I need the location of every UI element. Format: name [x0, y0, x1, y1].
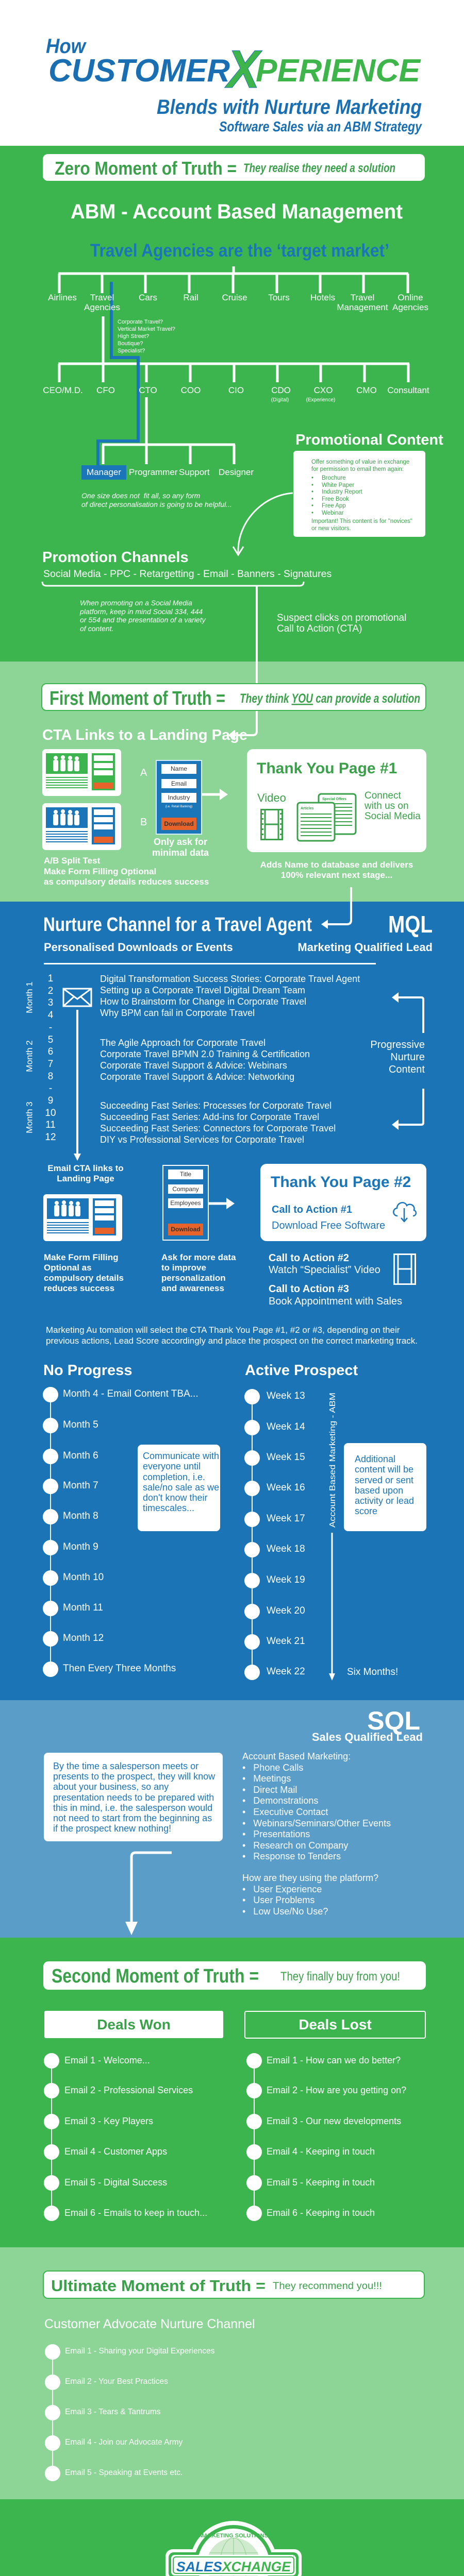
box: promotional content list: • Free Book — [311, 496, 349, 502]
heading box: First Moment of Truth: First Moment of Truth = — [49, 688, 225, 709]
text: calls to action 2 and 3: Call to Action #3 — [269, 1283, 349, 1295]
list: nurture email titles: The Agile Approach for Corporate Travel — [100, 1038, 266, 1048]
timeline: deals lost emails: Email 6 - Keeping in touch — [267, 2208, 375, 2218]
org tree diagram: CIO — [228, 385, 244, 395]
panel: Thank You Page #1: with us on — [364, 801, 409, 811]
list: account based marketing activities: • Meetings — [242, 1773, 291, 1784]
panel: Thank You Page #1: Connect — [364, 790, 401, 801]
heading: SQL: SQL — [367, 1706, 420, 1735]
timeline: deals lost emails — [246, 2053, 422, 2223]
org tree diagram: (Experience) — [306, 397, 335, 403]
heading box: Second Moment of Truth — [43, 1961, 426, 1990]
panel: Thank You Page #1: Thank You Page #1 — [257, 760, 397, 777]
note: social media 334: platform, keep in mind Social 334, 444 — [80, 607, 203, 615]
email numbers column: 8 — [48, 1071, 53, 1082]
title: How: How — [46, 35, 87, 58]
timeline: active prospect: Week 17 — [267, 1513, 305, 1524]
heading box: Ultimate Moment of Truth — [43, 2270, 425, 2299]
text: marketing automation: previous actions, Lead Score accordingly and place the prospect on the correct marketing track. — [46, 1336, 418, 1346]
text: make form filling optional — [44, 1252, 124, 1293]
timeline: deals lost emails: Email 4 - Keeping in touch — [267, 2146, 375, 2157]
list: account based marketing activities: How are they using the platform? — [242, 1873, 378, 1883]
month labels: Month 3 — [25, 1101, 35, 1133]
text: A/B split test: A/B Split Test — [44, 856, 100, 866]
heading box: Zero Moment of Truth — [43, 154, 425, 181]
roles: Programmer Support Designer — [129, 467, 254, 477]
heading: Active Prospect: Active Prospect — [245, 1362, 358, 1379]
text: calls to action 2 and 3 — [269, 1252, 416, 1307]
heading box: First Moment of Truth: They think YOU can provide a solution — [240, 691, 420, 706]
list: nurture email titles: Succeeding Fast Series: Add-ins for Corporate Travel — [100, 1112, 319, 1122]
subheading: Sales Qualified Lead: Sales Qualified Lead — [312, 1731, 423, 1743]
icon: landing page — [43, 1194, 122, 1241]
text: six months: Six Months! — [347, 1667, 398, 1677]
heading: Nurture Channel for a Travel Agent — [43, 911, 433, 938]
org tree diagram: Cars — [139, 293, 157, 302]
list: account based marketing activities: • Executive Contact — [242, 1807, 328, 1817]
timeline: advocate emails: Email 1 - Sharing your Digital Experiences — [65, 2347, 214, 2355]
timeline: active prospect: Week 19 — [267, 1574, 305, 1585]
icon: film strip — [393, 1253, 416, 1285]
text: calls to action 2 and 3: Call to Action #2 — [269, 1252, 349, 1264]
org tree diagram: CTO — [139, 385, 157, 395]
org tree diagram: Boutique? — [118, 341, 143, 347]
org tree diagram: Travel — [351, 293, 374, 302]
timeline: deals lost emails: Email 1 - How can we do better? — [267, 2055, 401, 2065]
title: CUSTOMERXPERIENCE: PERIENCE — [256, 53, 421, 89]
text: calls to action 2 and 3: Book Appointment with Sales — [269, 1296, 402, 1307]
text: email CTA links — [47, 1163, 124, 1183]
list: nurture email titles: Digital Transformation Success Stories: Corporate Travel Agent — [100, 974, 360, 984]
text: email CTA links: Landing Page — [57, 1174, 114, 1183]
text: suspect clicks CTA: Call to Action (CTA) — [277, 623, 362, 634]
panel: Thank You Page #1 — [247, 749, 426, 852]
list: account based marketing activities: • Response to Tenders — [242, 1851, 341, 1861]
email numbers column: 12 — [45, 1132, 56, 1143]
list: nurture email titles: Corporate Travel Support & Advice: Webinars — [100, 1060, 287, 1071]
list: account based marketing activities: Account Based Marketing: — [242, 1751, 351, 1761]
panel: nurture channel (MQL) — [0, 902, 464, 1700]
org tree diagram: CFO — [96, 385, 115, 395]
box: promotional content list: • Free App — [311, 503, 346, 509]
org tree diagram: Hotels — [310, 293, 335, 302]
heading box: Ultimate Moment of Truth: They recommend you!!! — [273, 2281, 382, 2292]
timeline: advocate emails: Email 4 - Join our Advocate Army — [65, 2438, 183, 2447]
text: marketing automation — [46, 1325, 418, 1346]
timeline: no progress: Month 7 — [63, 1480, 98, 1491]
labels: A and B: B — [140, 817, 147, 828]
text: only ask for minimal data: minimal data — [152, 848, 209, 858]
email numbers column: 11 — [45, 1120, 56, 1130]
heading box: Zero Moment of Truth: They realise they need a solution — [243, 161, 395, 175]
box: promotional content list: • Webinar — [311, 510, 344, 516]
panel: SQL sales qualified lead — [0, 1700, 464, 1938]
panel: ultimate moment of truth — [0, 2247, 464, 2499]
org tree diagram: COO — [181, 385, 201, 395]
text: ask for more data: personalization — [161, 1273, 226, 1283]
text: adds name to database: Adds Name to database and delivers — [260, 860, 413, 870]
timeline: no progress: Month 4 - Email Content TBA... — [63, 1388, 198, 1399]
email numbers column: 4 — [48, 1010, 53, 1021]
text: A/B split test — [44, 856, 209, 887]
text: marketing automation: Marketing Au tomation will select the CTA Thank You Page #1, #2 or #3, depending on their — [46, 1325, 400, 1335]
text: adds name to database — [260, 860, 413, 880]
icon: landing page A — [42, 749, 121, 796]
timeline: no progress: Month 12 — [63, 1633, 104, 1643]
timeline: deals won emails: Email 3 - Key Players — [64, 2116, 153, 2126]
text: only ask for minimal data — [152, 837, 209, 858]
panel: Thank You Page #1: Video — [257, 791, 286, 804]
email numbers column: 2 — [48, 986, 53, 996]
note: social media 334 — [79, 599, 206, 633]
icon: articles and special offers documents: Special Offers — [322, 798, 346, 801]
box: promotional content list: • Industry Report — [311, 489, 362, 495]
org tree diagram: Agencies — [392, 302, 428, 312]
panel: Thank You Page #2: Call to Action #1 — [272, 1204, 352, 1215]
email numbers column: 6 — [48, 1046, 53, 1057]
text: ask for more data: Ask for more data — [161, 1252, 236, 1262]
heading: ABM - Account Based Management: ABM - Account Based Management — [71, 200, 403, 223]
timeline: advocate emails: Email 2 - Your Best Practices — [65, 2377, 168, 2386]
text: only ask for minimal data: Only ask for — [154, 837, 207, 847]
text: adds name to database: 100% relevant next stage... — [281, 870, 392, 880]
subheading: personalised downloads / MQL: Marketing Qualified Lead — [297, 941, 433, 954]
icon: landing page B — [42, 803, 121, 850]
text: progressive nurture content: Progressive — [370, 1039, 425, 1050]
form: name email industry: Download — [164, 820, 194, 827]
box: Deals Won: Deals Won — [97, 2016, 171, 2032]
month labels: Month 2 — [25, 1040, 35, 1072]
text: ask for more data — [161, 1252, 236, 1293]
heading box: Ultimate Moment of Truth: Ultimate Moment of Truth = — [51, 2277, 266, 2295]
box: promotional content list: or new visitors. — [311, 526, 351, 532]
heading: Promotional Content: Promotional Content — [295, 432, 443, 448]
timeline: active prospect: Week 14 — [267, 1421, 305, 1432]
subheading: personalised downloads / MQL — [44, 941, 433, 954]
timeline: deals lost emails: Email 2 - How are you getting on? — [267, 2085, 406, 2095]
email numbers column: - — [49, 1083, 52, 1094]
heading: Travel Agencies target market: Travel Agencies are the ‘target market’ — [90, 241, 389, 261]
text: A/B split test: as compulsory details reduces success — [44, 877, 209, 887]
arrow: form to thank you page 2 — [209, 1198, 235, 1209]
org tree diagram: Consultant — [387, 385, 429, 395]
role: Manager box — [81, 465, 126, 480]
list: account based marketing activities: • Demonstrations — [242, 1795, 318, 1806]
org tree diagram: CEO/M.D. — [43, 385, 83, 395]
email numbers column — [45, 973, 56, 1143]
form: name email industry — [156, 760, 202, 835]
labels: A and B: A — [140, 767, 147, 778]
org tree diagram: Corporate Travel? — [118, 319, 163, 325]
list: nurture email titles: Setting up a Corporate Travel Digital Dream Team — [100, 985, 305, 995]
text: make form filling optional: compulsory details — [44, 1273, 124, 1283]
panel: zero moment of truth / ABM — [0, 146, 464, 662]
email numbers column: 1 — [48, 973, 53, 984]
panel: second moment of truth — [0, 1938, 464, 2247]
org tree diagram: Management — [337, 302, 388, 312]
list: nurture email titles — [100, 974, 360, 1145]
panel: Thank You Page #1: Social Media — [364, 811, 421, 822]
form: name email industry: Email — [171, 780, 187, 787]
heading box: Zero Moment of Truth: Zero Moment of Truth = — [55, 158, 237, 179]
timeline: deals won emails: Email 6 - Emails to keep in touch... — [64, 2208, 207, 2218]
list: nurture email titles: Corporate Travel Support & Advice: Networking — [100, 1072, 294, 1082]
list: nurture email titles: DIY vs Professional Services for Corporate Travel — [100, 1134, 304, 1145]
timeline: active prospect: Week 15 — [267, 1452, 305, 1463]
text: make form filling optional: Make Form Filling — [44, 1252, 119, 1262]
list: account based marketing activities: • Phone Calls — [242, 1762, 303, 1773]
text: suspect clicks CTA — [277, 613, 406, 634]
icon: envelope with down arrow — [63, 988, 92, 1161]
form: title company employees: Download — [171, 1226, 201, 1233]
org tree diagram: Agencies — [84, 302, 120, 312]
callout: additional content: Additional content will be served or sent based upon activity or lead score — [355, 1454, 414, 1516]
box: promotional content list: for permission to email them again: — [311, 466, 404, 472]
org tree diagram: Travel — [90, 293, 114, 302]
list: account based marketing activities: • User Problems — [242, 1895, 314, 1905]
list: account based marketing activities: • Research on Company — [242, 1840, 348, 1851]
title: CUSTOMERXPERIENCE: CUSTOMER — [48, 53, 230, 89]
heading box: Second Moment of Truth: Second Moment of Truth = — [52, 1965, 259, 1987]
list: nurture email titles: Succeeding Fast Series: Processes for Corporate Travel — [100, 1100, 332, 1111]
logo: salesXchange badge: TM — [293, 2555, 297, 2558]
subtitle: Software Sales via an ABM Strategy: Software Sales via an ABM Strategy — [219, 118, 422, 134]
org tree diagram — [43, 266, 429, 465]
heading: customer advocate nurture channel: Customer Advocate Nurture Channel — [44, 2317, 255, 2331]
org tree diagram: Tours — [268, 293, 290, 302]
text: progressive nurture content: Content — [389, 1064, 425, 1075]
box: promotional content list: Offer something of value in exchange — [311, 459, 409, 465]
text: A/B split test: Make Form Filling Optional — [44, 867, 156, 876]
label: account based marketing vertical with arrow — [328, 1393, 337, 1681]
logo: salesXchange badge: SALESXCHANGE — [176, 2559, 291, 2574]
form: title company employees — [162, 1165, 209, 1241]
list: nurture email titles: Succeeding Fast Series: Connectors for Corporate Travel — [100, 1123, 336, 1133]
timeline: no progress: Month 8 — [63, 1511, 98, 1521]
box: promotional content list: • Brochure — [311, 475, 346, 481]
roles: Programmer Support Designer: Support — [179, 467, 210, 477]
heading: Nurture Channel for a Travel Agent: Nurture Channel for a Travel Agent — [43, 914, 312, 936]
note: one size does not fit all — [81, 492, 232, 509]
timeline: deals lost emails: Email 3 - Our new developments — [267, 2116, 401, 2126]
text: channel list: Social Media - PPC - Retargetting - Email - Banners - Signatures — [43, 568, 332, 580]
timeline: active prospect: Week 21 — [267, 1636, 305, 1647]
email numbers column: 7 — [48, 1059, 53, 1070]
org tree diagram: Vertical Market Travel? — [118, 326, 175, 332]
timeline: advocate emails — [45, 2344, 261, 2483]
subheading: personalised downloads / MQL: Personalised Downloads or Events — [44, 941, 233, 954]
list: nurture email titles: Corporate Travel BPMN 2.0 Training & Certification — [100, 1049, 310, 1059]
timeline: deals won emails — [44, 2053, 214, 2223]
list: account based marketing activities: • User Experience — [242, 1884, 322, 1894]
panel: Thank You Page #2: Download Free Software — [272, 1220, 385, 1231]
email numbers column: 3 — [48, 997, 53, 1008]
icon: articles and special offers documents: Articles — [301, 807, 314, 810]
note: social media 334: When promoting on a Social Media — [80, 599, 192, 607]
text: progressive nurture content — [370, 1039, 425, 1075]
text: make form filling optional: Optional as — [44, 1263, 92, 1273]
logo: salesXchange badge — [164, 2521, 303, 2576]
note: social media 334: or 554 and the presentation of a variety — [80, 616, 206, 624]
timeline: active prospect — [244, 1389, 305, 1680]
note: social media 334: of content. — [80, 624, 113, 633]
callout: additional content — [344, 1443, 426, 1531]
connector line with arrow to CTA heading — [229, 662, 352, 902]
timeline: no progress: Month 6 — [63, 1450, 98, 1461]
icon: cloud download — [393, 1202, 417, 1223]
timeline: deals won emails: Email 2 - Professional Services — [64, 2085, 193, 2095]
timeline: deals lost emails: Email 5 - Keeping in touch — [267, 2177, 375, 2188]
timeline: deals won emails: Email 1 - Welcome... — [64, 2055, 150, 2065]
box: Deals Lost — [244, 2011, 426, 2039]
title: CUSTOMERXPERIENCE — [48, 40, 421, 99]
arrows: progressive nurture loop — [392, 992, 424, 1130]
text: suspect clicks CTA: Suspect clicks on promotional — [277, 613, 406, 623]
month labels — [25, 981, 35, 1133]
text: make form filling optional: reduces success — [44, 1283, 114, 1293]
timeline: no progress — [43, 1387, 198, 1677]
timeline: no progress: Then Every Three Months — [63, 1663, 176, 1674]
org tree diagram: Online — [397, 293, 423, 302]
heading: No Progress: No Progress — [43, 1362, 132, 1379]
org tree diagram: CDO — [271, 385, 291, 395]
heading box: First Moment of Truth — [41, 683, 426, 711]
timeline: advocate emails: Email 3 - Tears & Tantrums — [65, 2408, 161, 2416]
org tree diagram: Rail — [183, 293, 198, 302]
month labels: Month 1 — [25, 981, 35, 1013]
panel: first moment of truth — [0, 662, 464, 902]
list: account based marketing activities: • Low Use/No Use? — [242, 1906, 328, 1917]
note: one size does not fit all: of direct personalisation is going to be helpful... — [81, 500, 232, 509]
callout: communicate with everyone: Communicate with everyone until completion, i.e. sale/no sale as we don't know their timescales... — [143, 1451, 219, 1513]
role: Manager box: Manager — [87, 467, 121, 477]
text: calls to action 2 and 3: Watch “Specialist” Video — [269, 1264, 380, 1276]
timeline: active prospect: Week 18 — [267, 1544, 305, 1554]
timeline: no progress: Month 10 — [63, 1572, 104, 1583]
list: account based marketing activities: • Presentations — [242, 1829, 310, 1839]
text: email CTA links: Email CTA links to — [47, 1163, 124, 1173]
box: promotional content list: Important! This content is for "novices" — [311, 518, 412, 524]
list: nurture email titles: How to Brainstorm for Change in Corporate Travel — [100, 996, 306, 1007]
subtitle: Blends with Nurture Marketing: Blends with Nurture Marketing — [157, 96, 422, 118]
list: account based marketing activities: • Direct Mail — [242, 1785, 297, 1795]
label: account based marketing vertical with arrow: Account Based Marketing - ABM — [328, 1393, 337, 1528]
callout: salesperson preparation: By the time a salesperson meets or presents to the prospect, they will know about your business, so any presentation needs to be prepared with this in mind, i.e. the salesperson would not need to start from the beginning as if the prospect knew nothing! — [53, 1761, 215, 1834]
form: title company employees: Employees — [170, 1199, 201, 1207]
email numbers column: - — [49, 1022, 52, 1033]
email numbers column: 5 — [48, 1035, 53, 1045]
bracket and connector line — [41, 582, 304, 662]
box: promotional content list: • White Paper — [311, 482, 354, 488]
email numbers column: 10 — [45, 1108, 56, 1118]
timeline: no progress: Month 9 — [63, 1541, 98, 1552]
org tree diagram: CXO — [314, 385, 333, 395]
box: Deals Won — [44, 2011, 223, 2038]
list: account based marketing activities — [242, 1751, 391, 1917]
arrow: into nurture heading — [321, 902, 352, 929]
panel: Thank You Page #2: Thank You Page #2 — [271, 1174, 411, 1191]
text: progressive nurture content: Nurture — [390, 1052, 425, 1063]
timeline: no progress: Month 5 — [63, 1419, 98, 1430]
list: account based marketing activities: • Webinars/Seminars/Other Events — [242, 1818, 391, 1828]
box: Deals Lost: Deals Lost — [299, 2016, 372, 2032]
timeline: no progress: Month 11 — [63, 1602, 103, 1613]
logo: salesXchange badge: MARKETING SOLUTIONS — [199, 2533, 268, 2539]
labels: A and B — [140, 767, 147, 828]
org tree diagram: Airlines — [48, 293, 77, 302]
note: one size does not fit all: One size does not fit all, so any form — [81, 492, 200, 500]
org tree diagram: High Street? — [118, 333, 149, 340]
list: nurture email titles: Why BPM can fail in Corporate Travel — [100, 1008, 255, 1018]
heading box: Second Moment of Truth: They finally buy from you! — [280, 1970, 400, 1984]
arrow: form to thank you page — [202, 789, 228, 800]
org tree diagram: Specialist? — [118, 348, 145, 354]
text: ask for more data: to improve — [161, 1263, 206, 1273]
timeline: active prospect: Week 22 — [267, 1666, 305, 1677]
text: ask for more data: and awareness — [161, 1283, 224, 1293]
org tree diagram: CMO — [356, 385, 377, 395]
box: promotional content list — [293, 451, 425, 537]
callout: communicate with everyone — [138, 1445, 220, 1531]
timeline: deals won emails: Email 5 - Digital Success — [64, 2177, 167, 2188]
heading: CTA Links to a Landing Page: CTA Links to a Landing Page — [42, 727, 247, 743]
timeline: active prospect: Week 13 — [267, 1391, 305, 1401]
timeline: active prospect: Week 20 — [267, 1605, 305, 1616]
heading: Nurture Channel for a Travel Agent: MQL — [388, 911, 433, 938]
form: name email industry: Industry — [168, 794, 190, 801]
form: name email industry: (i.e. Retail Banking) — [165, 805, 192, 808]
form: name email industry: Name — [171, 765, 187, 772]
icon: articles and special offers documents — [297, 793, 357, 842]
roles: Programmer Support Designer: Programmer — [129, 467, 177, 477]
panel: footer — [0, 2499, 464, 2576]
org tree diagram: (Digital) — [271, 397, 289, 403]
panel: title header — [0, 0, 464, 146]
timeline: deals won emails: Email 4 - Customer Apps — [64, 2146, 167, 2157]
timeline: advocate emails: Email 5 - Speaking at Events etc. — [65, 2468, 183, 2477]
heading: Promotion Channels: Promotion Channels — [42, 549, 189, 566]
form: title company employees: Company — [172, 1185, 199, 1193]
org tree diagram: Cruise — [222, 293, 247, 302]
panel: Thank You Page #2 — [260, 1164, 426, 1241]
arrow: curved from promotional content to channels — [232, 493, 293, 556]
form: title company employees: Title — [180, 1171, 191, 1178]
arrow: down to second moment — [124, 1850, 175, 1937]
timeline: active prospect: Week 16 — [267, 1482, 305, 1493]
roles: Programmer Support Designer: Designer — [219, 467, 254, 477]
icon: film strip — [260, 809, 283, 840]
email numbers column: 9 — [48, 1095, 53, 1106]
title: CUSTOMERXPERIENCE: X — [224, 40, 262, 99]
